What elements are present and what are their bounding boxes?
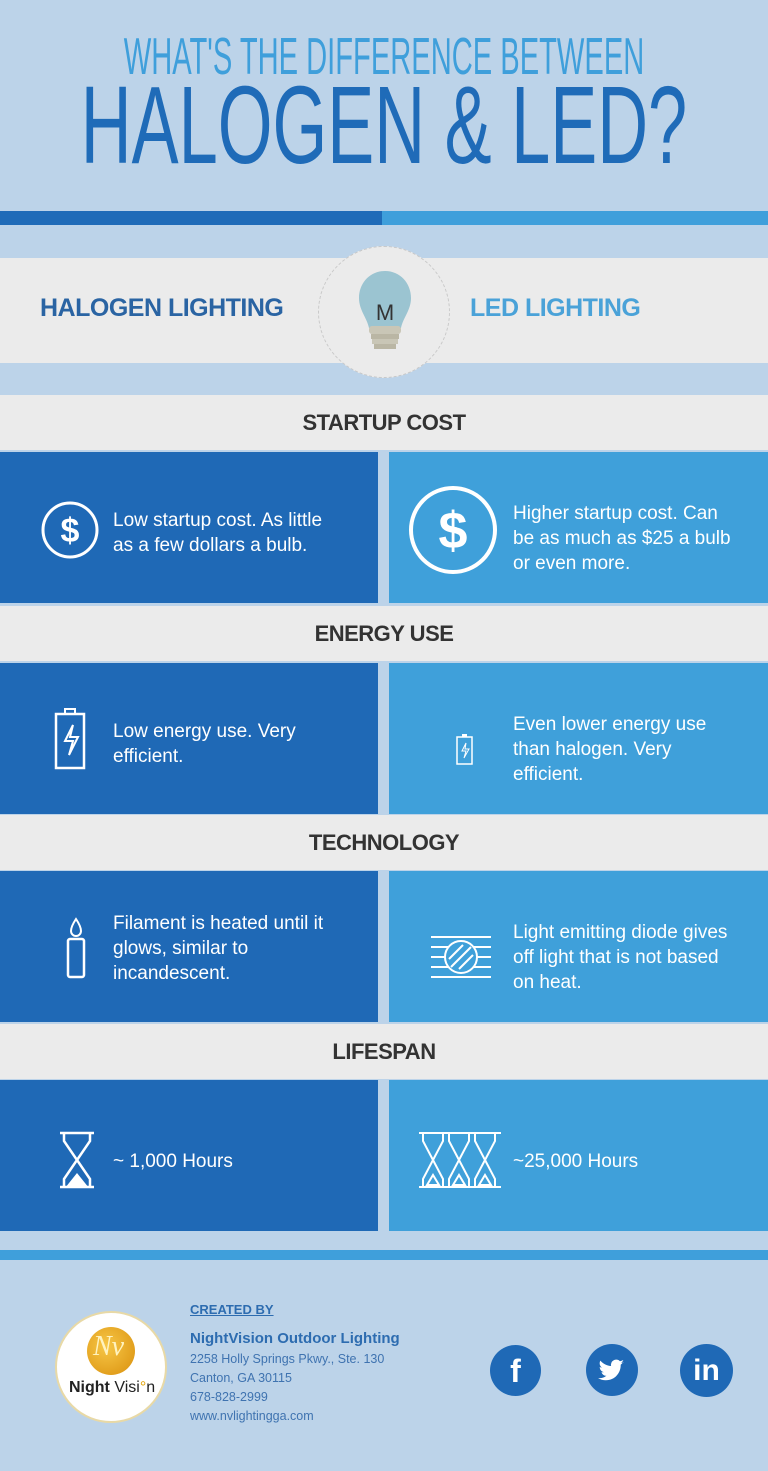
icon: NightVision logo bbox=[55, 1311, 167, 1423]
text: created by: CREATED BY bbox=[190, 1302, 274, 1317]
title: HALOGEN & LED? bbox=[81, 64, 687, 187]
panel: led startup cost: Higher startup cost. Can bbox=[513, 503, 718, 524]
panel: led technology: on heat. bbox=[513, 972, 582, 993]
icon: dollar: $ bbox=[61, 512, 80, 550]
panel: led energy bbox=[389, 663, 768, 814]
icon: twitter bbox=[586, 1344, 638, 1396]
panel: led energy: efficient. bbox=[513, 764, 583, 785]
icon: bulb bbox=[318, 246, 450, 378]
panel: led energy: than halogen. Very bbox=[513, 739, 671, 760]
panel: led startup cost: be as much as $25 a bulb bbox=[513, 528, 731, 549]
section header: technology: TECHNOLOGY bbox=[309, 830, 459, 855]
panel: halogen energy: efficient. bbox=[113, 746, 183, 767]
text: created by: Canton, GA 30115 bbox=[190, 1371, 292, 1385]
panel: led technology: Light emitting diode gives bbox=[513, 922, 727, 943]
icon: small battery bbox=[456, 734, 473, 765]
panel: halogen startup cost bbox=[0, 452, 378, 603]
panel: halogen technology: incandescent. bbox=[113, 963, 230, 984]
icon: facebook bbox=[490, 1345, 541, 1396]
panel: halogen technology: Filament is heated until it bbox=[113, 913, 323, 934]
icon: NightVision logo: Night Visi°n bbox=[69, 1379, 155, 1396]
section header: lifespan: LIFESPAN bbox=[332, 1039, 436, 1064]
text: created by: www.nvlightingga.com bbox=[190, 1409, 314, 1423]
led heading: LED LIGHTING bbox=[470, 294, 640, 322]
text: created by: 2258 Holly Springs Pkwy., Ste. 130 bbox=[190, 1352, 384, 1366]
top bar bbox=[0, 211, 768, 225]
icon: dollar large: $ bbox=[439, 502, 468, 560]
text: created by bbox=[190, 1302, 400, 1423]
icon: bulb: M bbox=[376, 300, 394, 325]
icon: dollar large bbox=[409, 486, 497, 574]
icon: facebook: f bbox=[510, 1353, 521, 1389]
text: created by: 678-828-2999 bbox=[190, 1390, 268, 1404]
comparison heading band bbox=[0, 258, 768, 363]
icon: dollar bbox=[42, 502, 98, 558]
panel: led energy: Even lower energy use bbox=[513, 714, 706, 735]
panel: led technology bbox=[389, 871, 768, 1022]
panel: halogen energy bbox=[0, 663, 378, 814]
panel: led lifespan: ~25,000 Hours bbox=[513, 1151, 638, 1172]
title: WHAT'S THE DIFFERENCE BETWEEN bbox=[124, 28, 644, 86]
panel: halogen lifespan: ~ 1,000 Hours bbox=[113, 1151, 233, 1172]
icon: linkedin bbox=[680, 1344, 733, 1397]
panel: halogen technology bbox=[0, 871, 378, 1022]
icon: diode bbox=[431, 936, 491, 978]
icon: linkedin: in bbox=[693, 1354, 720, 1387]
panel: halogen technology: glows, similar to bbox=[113, 938, 248, 959]
icon: battery bbox=[54, 708, 86, 770]
icon: hourglass bbox=[60, 1132, 94, 1188]
panel: halogen lifespan bbox=[0, 1080, 378, 1231]
panel: halogen energy: Low energy use. Very bbox=[113, 721, 296, 742]
panel: led startup cost: or even more. bbox=[513, 553, 630, 574]
icon: three hourglasses bbox=[419, 1132, 501, 1188]
panel: led startup cost bbox=[389, 452, 768, 603]
panel: led lifespan bbox=[389, 1080, 768, 1231]
section header: energy use bbox=[0, 606, 768, 661]
bottom bar bbox=[0, 1250, 768, 1260]
section header: startup cost: STARTUP COST bbox=[302, 410, 466, 435]
icon: NightVision logo: Nv bbox=[93, 1331, 124, 1362]
section header: technology bbox=[0, 815, 768, 870]
halogen heading: HALOGEN LIGHTING bbox=[40, 294, 283, 322]
section header: energy use: ENERGY USE bbox=[315, 621, 453, 646]
text: created by: NightVision Outdoor Lighting bbox=[190, 1330, 400, 1347]
section header: lifespan bbox=[0, 1024, 768, 1079]
section header: startup cost bbox=[0, 395, 768, 450]
icon: candle bbox=[66, 917, 86, 978]
panel: halogen startup cost: as a few dollars a bulb. bbox=[113, 535, 307, 556]
panel: led technology: off light that is not based bbox=[513, 947, 719, 968]
panel: halogen startup cost: Low startup cost. As little bbox=[113, 510, 322, 531]
